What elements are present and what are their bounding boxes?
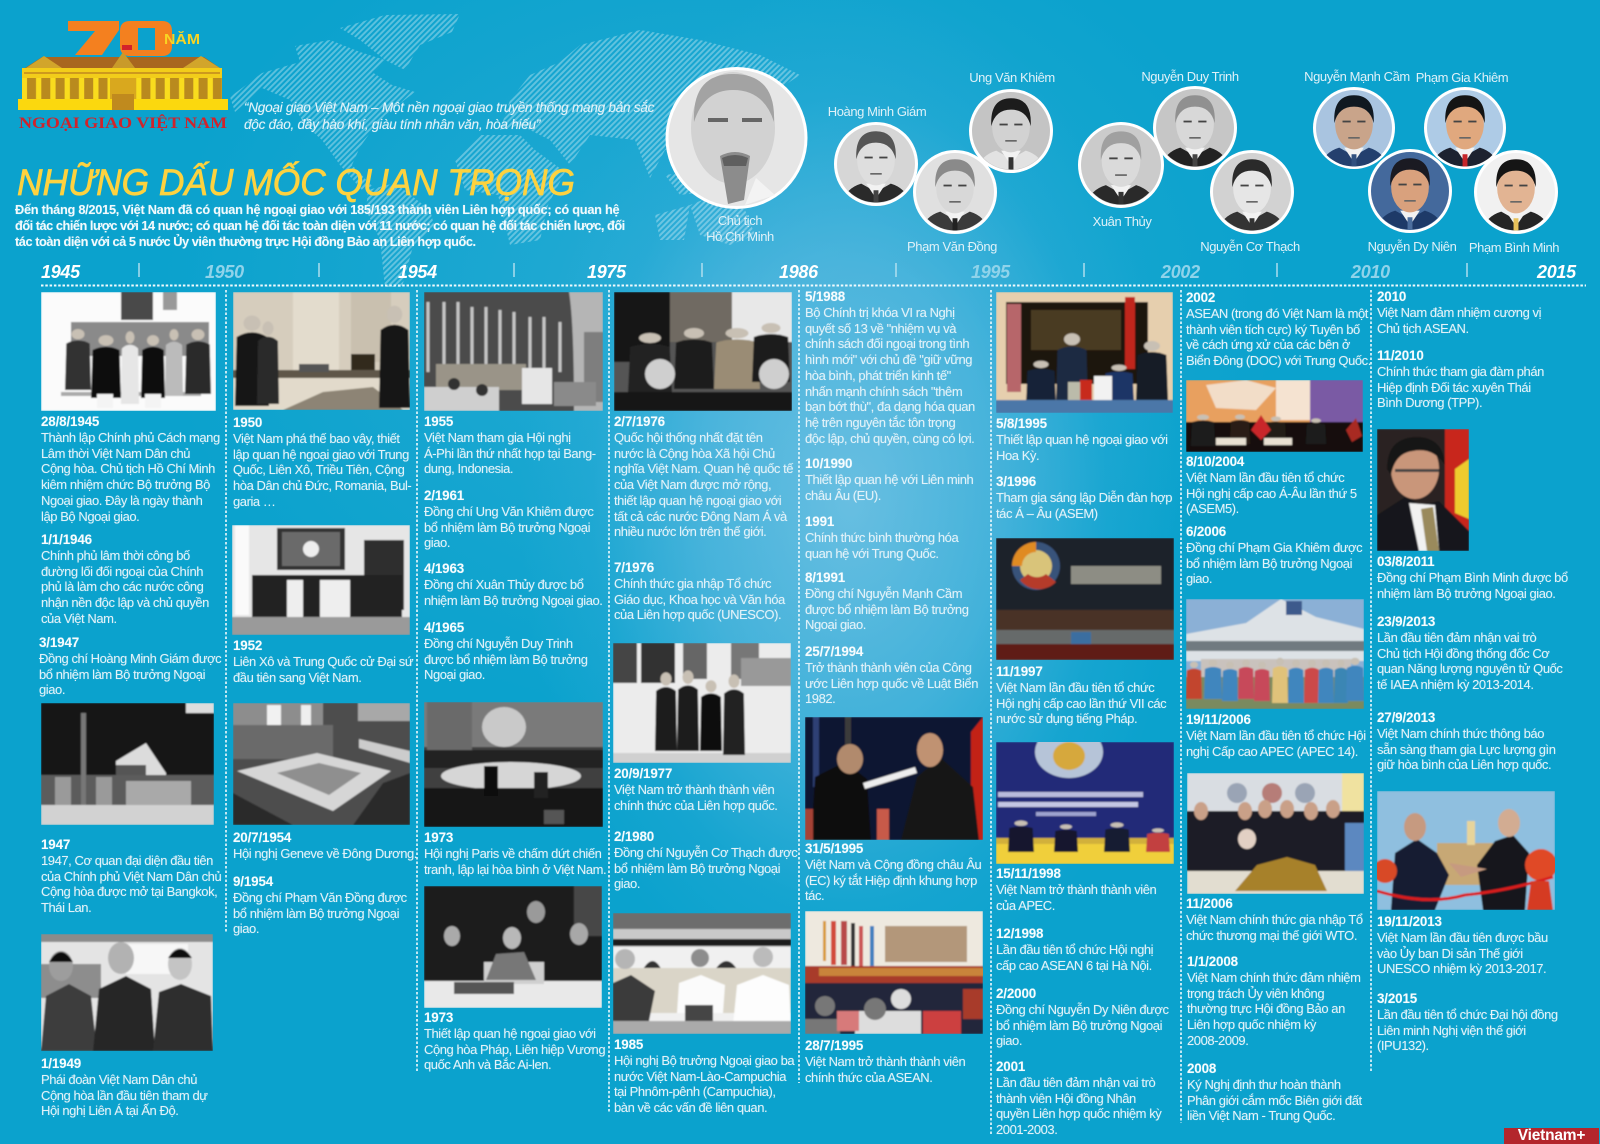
column 5: 1986 to 1995: 5/1988	[805, 289, 845, 304]
heading: những dấu mốc quan trọng: NHỮNG DẤU MỐC QUAN TRỌNG	[17, 161, 575, 203]
column 4: 1975 to 1986: giao.	[614, 876, 640, 891]
photo: 19/11/2013 UNESCO	[1377, 791, 1555, 910]
column 1: 1945 to 1950: Cộng hòa. Chủ tịch Hồ Chí Minh	[41, 461, 215, 476]
intro paragraph: tác toàn diện với cả 5 nước Ủy viên thường trực Hội đồng Bảo an Liên hợp quốc.	[15, 234, 476, 249]
column 7: 2002 to 2010: Ký Nghị định thư hoàn thành	[1187, 1077, 1341, 1092]
column 4: 1975 to 1986: 20/9/1977	[614, 766, 672, 781]
column 8: 2010 to 2015: Chủ tịch Hội đồng thống đốc Cơ	[1377, 646, 1549, 660]
column 5: 1986 to 1995: (EC) ký tắt Hiệp định khung hợp	[805, 872, 977, 888]
column 5: 1986 to 1995: hòa bình, phát triển kinh tế"	[805, 368, 951, 383]
column 6: 1995 to 2002	[996, 416, 1172, 1137]
column 8: 2010 to 2015: vào Ủy ban Di sản Thế giới	[1377, 946, 1523, 960]
timeline years: 1995	[971, 262, 1010, 282]
photo: 1973 signing	[424, 886, 602, 1008]
column 8: 2010 to 2015: nhiệm làm Bộ trưởng Ngoại giao.	[1377, 586, 1555, 600]
column 1: 1945 to 1950: 1/1949	[41, 1056, 81, 1071]
column 1: 1945 to 1950: đường lối đối ngoại của Chính	[41, 564, 203, 578]
column 7: 2002 to 2010: thành viên tích cực) ký Tuyên bố	[1186, 322, 1360, 336]
column 4: 1975 to 1986: nghĩa Việt Nam. Quan hệ quốc tế	[614, 461, 793, 476]
column 5: 1986 to 1995: hình mới" với chủ đề "giữ vững	[805, 352, 972, 367]
column 3: 1954 to 1975: 2/1961	[424, 488, 464, 503]
photo: 11/1997 Francophonie	[996, 538, 1174, 660]
column 7: 2002 to 2010: chức thương mại thế giới WTO.	[1186, 928, 1357, 942]
photo: 20/7/1954 Geneva	[233, 703, 410, 825]
column 6: 1995 to 2002: quyền Liên hợp quốc nhiệm kỳ	[996, 1106, 1161, 1121]
portrait name labels: Phạm Gia Khiêm	[1416, 70, 1508, 85]
column 7: 2002 to 2010: về cách ứng xử của các bên ở	[1186, 337, 1350, 352]
column 8: 2010 to 2015: giữ hòa bình của Liên hợp quốc.	[1377, 757, 1551, 772]
logo: 70 năm ngoại giao Việt Nam	[18, 21, 228, 132]
column 5: 1986 to 1995: hệ trên nguyên tắc tôn trọng	[805, 415, 955, 430]
column 1: 1945 to 1950: Cộng hòa được mở tại Bangkok,	[41, 884, 217, 899]
column 8: 2010 to 2015: 19/11/2013	[1377, 914, 1442, 929]
column 7: 2002 to 2010: 2002	[1186, 290, 1215, 305]
column 3: 1954 to 1975: Ngoại giao.	[424, 667, 485, 682]
portrait name labels: Nguyễn Mạnh Cầm	[1304, 69, 1410, 84]
column 7: 2002 to 2010: 1/1/2008	[1187, 954, 1238, 969]
column 3: 1954 to 1975: 1973	[424, 1010, 453, 1025]
portrait name labels: Ung Văn Khiêm	[969, 70, 1055, 85]
column 7: 2002 to 2010: Việt Nam chính thức gia nhập Tổ	[1186, 912, 1363, 927]
column 2: 1950 to 1954: 9/1954	[233, 874, 273, 889]
column 5: 1986 to 1995: Ngoại giao.	[805, 617, 866, 632]
photo: 1973 Paris conference hall	[424, 702, 603, 827]
column 5: 1986 to 1995: 10/1990	[805, 456, 852, 471]
photo: 15/11/1998 APEC	[996, 742, 1174, 864]
column 5: 1986 to 1995: Trở thành thành viên của Công	[805, 660, 972, 675]
timeline years: 2002	[1161, 262, 1200, 282]
column 8: 2010 to 2015: Lần đầu tiên tổ chức Đại hội đồng	[1377, 1007, 1558, 1022]
column 7: 2002 to 2010: Việt Nam chính thức đảm nhiệm	[1187, 970, 1360, 985]
quote: độc đáo, đầy hào khí, giàu tính nhân văn, hòa hiếu”	[244, 117, 540, 132]
portrait: Ung Văn Khiêm	[969, 89, 1053, 173]
column 2: 1950 to 1954: đầu tiên sang Việt Nam.	[233, 670, 361, 684]
column 6: 1995 to 2002: Hội nghị cấp cao lần thứ VII các	[996, 696, 1166, 710]
column 1: 1945 to 1950	[38, 414, 222, 1118]
column 7: 2002 to 2010: Đồng chí Phạm Gia Khiêm được	[1186, 540, 1362, 555]
quote	[244, 99, 654, 132]
column 5: 1986 to 1995: ước Liên hợp quốc về Luật Biển	[805, 676, 978, 690]
portrait name labels: Xuân Thủy	[1093, 214, 1151, 229]
column 8: 2010 to 2015: Việt Nam đảm nhiệm cương vị	[1377, 305, 1541, 320]
column 7: 2002 to 2010: (ASEM5).	[1186, 501, 1239, 516]
column 4: 1975 to 1986: 7/1976	[614, 560, 654, 575]
column 7: 2002 to 2010: Hội nghị cấp cao Á-Âu lần thứ 5	[1186, 486, 1357, 500]
column 6: 1995 to 2002: bổ nhiệm làm Bộ trưởng Ngoại	[996, 1018, 1162, 1032]
column 1: 1945 to 1950: Thái Lan.	[41, 900, 91, 915]
timeline years: 1950	[205, 262, 244, 282]
column 5: 1986 to 1995: Bộ Chính trị khóa VI ra Nghị	[805, 305, 955, 320]
portrait name labels: Nguyễn Dy Niên	[1368, 239, 1456, 254]
column 7: 2002 to 2010: Phân giới cắm mốc Biên giới đất	[1187, 1092, 1362, 1108]
portrait: Phạm Gia Khiêm	[1424, 87, 1506, 169]
column 6: 1995 to 2002: Hoa Kỳ.	[996, 448, 1039, 462]
column 4: 1975 to 1986: Quốc hội thống nhất đặt tên	[614, 430, 763, 445]
column 4: 1975 to 1986: bàn về các vấn đề liên quan.	[614, 1100, 767, 1115]
column 4: 1975 to 1986: của Liên hợp quốc (UNESCO).	[614, 607, 781, 622]
column 1: 1945 to 1950: lập Bộ Ngoại giao.	[41, 508, 139, 524]
column 7: 2002 to 2010: ASEAN (trong đó Việt Nam là một	[1186, 306, 1368, 321]
column 4: 1975 to 1986: 2/7/1976	[614, 414, 665, 429]
column 1: 1945 to 1950: 1947	[41, 837, 70, 852]
portrait: Nguyễn Mạnh Cầm	[1313, 87, 1395, 169]
column 8: 2010 to 2015: Chủ tịch ASEAN.	[1377, 320, 1469, 336]
portrait name labels: Phạm Văn Đồng	[907, 239, 997, 254]
column 1: 1945 to 1950: Đồng chí Hoàng Minh Giám được	[39, 651, 221, 666]
column 7: 2002 to 2010	[1186, 290, 1371, 1123]
portrait: Xuân Thủy	[1078, 122, 1164, 208]
column 4: 1975 to 1986: Chính thức gia nhập Tổ chức	[614, 576, 771, 591]
column 5: 1986 to 1995: Thiết lập quan hệ với Liên minh	[805, 472, 973, 487]
column 5: 1986 to 1995: quyết số 13 về "nhiệm vụ và	[805, 320, 956, 336]
column 7: 2002 to 2010: trọng trách Ủy viên không	[1187, 986, 1324, 1000]
portrait: Nguyễn Cơ Thạch	[1210, 150, 1294, 234]
photo: 20/9/1977 UN	[613, 643, 791, 763]
column 7: 2002 to 2010: 2008-2009.	[1187, 1033, 1248, 1048]
column 3: 1954 to 1975: nhiệm làm Bộ trưởng Ngoại giao.	[424, 592, 602, 608]
column 6: 1995 to 2002: Lần đầu tiên đảm nhận vai trò	[996, 1075, 1155, 1090]
column 8: 2010 to 2015: 11/2010	[1377, 348, 1424, 363]
photo: 19/11/2006 APEC 14	[1186, 599, 1364, 709]
photo: 03/8/2011 Phạm Bình Minh	[1377, 429, 1469, 551]
column 1: 1945 to 1950: 1/1/1946	[41, 532, 92, 547]
intro paragraph: đối tác chiến lược với 14 nước; có quan hệ đối tác toàn diện với 11 nước; có quan hệ đối tác chiến lược, đối	[15, 218, 625, 233]
column 4: 1975 to 1986: Hội nghị Bộ trưởng Ngoại giao ba	[614, 1053, 794, 1068]
column 7: 2002 to 2010: giao.	[1186, 571, 1212, 586]
column 8: 2010 to 2015: sẵn sàng tham gia Lực lượng gìn	[1377, 742, 1556, 756]
column 6: 1995 to 2002: giao.	[996, 1033, 1022, 1048]
column 2: 1950 to 1954: 1952	[233, 638, 262, 653]
column 6: 1995 to 2002: Thiết lập quan hệ ngoại giao với	[996, 432, 1168, 447]
column 6: 1995 to 2002: thành viên Hội đồng Nhân	[996, 1090, 1136, 1106]
portrait: Phạm Văn Đồng	[913, 150, 997, 234]
column 3: 1954 to 1975: Đồng chí Nguyễn Duy Trinh	[424, 636, 573, 651]
column 6: 1995 to 2002: 2001	[996, 1059, 1025, 1074]
column 4: 1975 to 1986: thiết lập quan hệ ngoại giao với	[614, 493, 781, 508]
column 4: 1975 to 1986: tất cả các nước Đông Nam Á và	[614, 508, 787, 524]
column 5: 1986 to 1995: 1991	[805, 514, 834, 529]
column 2: 1950 to 1954: 20/7/1954	[233, 830, 291, 845]
column 4: 1975 to 1986: 1985	[614, 1037, 643, 1052]
column 3: 1954 to 1975: Việt Nam tham gia Hội nghị	[424, 430, 571, 445]
photo: 11/2006 WTO	[1187, 773, 1364, 894]
portrait name labels	[706, 69, 1559, 255]
column 1: 1945 to 1950: 3/1947	[39, 635, 79, 650]
column 6: 1995 to 2002: 12/1998	[996, 926, 1043, 941]
column 3: 1954 to 1975: 4/1965	[424, 620, 464, 635]
column 3: 1954 to 1975: quốc Anh và Bắc Ai-len.	[424, 1057, 551, 1072]
column 8: 2010 to 2015: Việt Nam lần đầu tiên được bầu	[1377, 930, 1548, 945]
portrait: Hồ Chí Minh	[666, 67, 808, 209]
column 3: 1954 to 1975: 1955	[424, 414, 453, 429]
column 3: 1954 to 1975: giao.	[424, 535, 450, 550]
column 2: 1950 to 1954: lập quan hệ ngoại giao với Trung	[233, 446, 409, 462]
column 8: 2010 to 2015: (IPU132).	[1377, 1038, 1429, 1053]
column 1: 1945 to 1950: kiêm nhiệm chức Bộ trưởng Bộ	[41, 477, 210, 492]
column 8: 2010 to 2015: tế IAEA nhiệm kỳ 2013-2014.	[1377, 677, 1534, 692]
column 2: 1950 to 1954: Việt Nam phá thế bao vây, thiết	[233, 431, 400, 446]
column 7: 2002 to 2010: 6/2006	[1186, 524, 1226, 539]
column 3: 1954 to 1975: Đồng chí Ung Văn Khiêm được	[424, 504, 593, 519]
column 7: 2002 to 2010: Việt Nam lần đầu tiên tổ chức Hội	[1186, 728, 1366, 743]
photo: 1947 Bangkok office	[41, 703, 214, 825]
photo: 8/10/2004 ASEM5	[1186, 380, 1363, 452]
column 6: 1995 to 2002: cấp cao ASEAN 6 tại Hà Nội.	[996, 958, 1152, 972]
column 5: 1986 to 1995: châu Âu (EU).	[805, 488, 881, 502]
column 4: 1975 to 1986: chính thức của Liên hợp quốc.	[614, 798, 777, 812]
column 4: 1975 to 1986	[614, 414, 798, 1115]
portrait: Phạm Bình Minh	[1474, 150, 1558, 234]
column 8: 2010 to 2015: 23/9/2013	[1377, 614, 1435, 629]
column 5: 1986 to 1995: 25/7/1994	[805, 644, 863, 659]
column 8: 2010 to 2015: 03/8/2011	[1377, 554, 1434, 569]
column 8: 2010 to 2015: UNESCO nhiệm kỳ 2013-2017.	[1377, 961, 1546, 976]
column 5: 1986 to 1995: chính thức của ASEAN.	[805, 1070, 932, 1084]
portrait name labels: Nguyễn Duy Trinh	[1141, 69, 1239, 84]
column 5: 1986 to 1995: được bổ nhiệm làm Bộ trưởng	[805, 602, 968, 616]
column 8: 2010 to 2015: Liên minh Nghị viện thế giới	[1377, 1022, 1526, 1038]
column 5: 1986 to 1995: Đồng chí Nguyễn Mạnh Cầm	[805, 586, 962, 601]
column 7: 2002 to 2010: Việt Nam lần đầu tiên tổ chức	[1186, 470, 1344, 485]
column 7: 2002 to 2010: 2008	[1187, 1061, 1216, 1076]
photo: 1950 credentials	[233, 292, 410, 410]
column 1: 1945 to 1950: giao.	[39, 682, 65, 697]
column 5: 1986 to 1995: độc lập, chủ quyền, cùng có lợi.	[805, 431, 974, 446]
portrait: Nguyễn Dy Niên	[1368, 149, 1452, 233]
column 6: 1995 to 2002: Việt Nam trở thành thành viên	[996, 882, 1156, 897]
photo: 28/7/1995 ASEAN	[805, 911, 983, 1034]
timeline ticks and dotted rules	[41, 263, 1586, 1135]
column 5: 1986 to 1995: chính sách đối ngoại trong tình	[805, 336, 969, 351]
column 8: 2010 to 2015: Bình Dương (TPP).	[1377, 395, 1482, 410]
column 6: 1995 to 2002: Việt Nam lần đầu tiên tổ chức	[996, 680, 1154, 695]
column 2: 1950 to 1954: bổ nhiệm làm Bộ trưởng Ngoại	[233, 906, 399, 920]
column 5: 1986 to 1995: Việt Nam trở thành thành viên	[805, 1054, 965, 1069]
column 5: 1986 to 1995: nhấn mạnh chính sách "thêm	[805, 384, 962, 398]
column 2: 1950 to 1954: Hội nghị Geneve về Đông Dương.	[233, 846, 417, 861]
column 7: 2002 to 2010: 11/2006	[1186, 896, 1233, 911]
column 7: 2002 to 2010: Liên hợp quốc nhiệm kỳ	[1187, 1017, 1316, 1032]
column 5: 1986 to 1995: 28/7/1995	[805, 1038, 863, 1053]
column 8: 2010 to 2015: 27/9/2013	[1377, 710, 1435, 725]
column 5: 1986 to 1995: 8/1991	[805, 570, 845, 585]
photo: 1955 Bandung	[424, 292, 603, 411]
photo: 31/5/1995 EC	[805, 717, 983, 840]
column 1: 1945 to 1950: Hội nghị Liên Á tại Ấn Độ.	[41, 1103, 178, 1118]
column 4: 1975 to 1986: bổ nhiệm làm Bộ trưởng Ngoại	[614, 860, 780, 876]
photo: 1985 Phnom Penh	[613, 913, 791, 1034]
timeline years	[41, 262, 1576, 282]
column 7: 2002 to 2010: 8/10/2004	[1186, 454, 1244, 469]
column 5: 1986 to 1995: bạn bớt thù", đa dạng hóa quan	[805, 399, 975, 414]
timeline years: 2010	[1351, 262, 1390, 282]
column 5: 1986 to 1995: Chính thức bình thường hóa	[805, 530, 958, 545]
portrait: Hoàng Minh Giám	[834, 122, 918, 206]
column 8: 2010 to 2015: Hiệp định Đối tác xuyên Thái	[1377, 380, 1531, 394]
column 5: 1986 to 1995: 1982.	[805, 691, 835, 706]
column 2: 1950 to 1954: hòa Dân chủ Đức, Romania, Bul-	[233, 478, 411, 493]
column 4: 1975 to 1986: Đồng chí Nguyễn Cơ Thạch được	[614, 845, 797, 860]
column 6: 1995 to 2002: Tham gia sáng lập Diễn đàn hợp	[996, 490, 1172, 505]
timeline years: 1945	[41, 262, 80, 282]
column 1: 1945 to 1950: Lâm thời Việt Nam Dân chủ	[41, 446, 190, 460]
column 7: 2002 to 2010: 19/11/2006	[1186, 712, 1251, 727]
photo: 28/8/1945 group	[41, 292, 216, 411]
column 1: 1945 to 1950: phủ là làm cho các nước công	[41, 579, 203, 594]
column 2: 1950 to 1954: garia …	[233, 494, 275, 509]
timeline years: 1954	[398, 262, 437, 282]
column 8: 2010 to 2015: Lần đầu tiên đảm nhận vai trò	[1377, 630, 1536, 645]
column 2: 1950 to 1954: giao.	[233, 921, 259, 936]
column 4: 1975 to 1986: 2/1980	[614, 829, 654, 844]
column 3: 1954 to 1975: Á-Phi lần thứ nhất họp tại Bang-	[424, 446, 596, 460]
column 3: 1954 to 1975: Cộng hòa Pháp, Liên hiệp Vương	[424, 1042, 605, 1056]
column 3: 1954 to 1975: bổ nhiệm làm Bộ trưởng Ngoại	[424, 520, 590, 534]
column 4: 1975 to 1986: nước là Cộng hòa Xã hội Chủ	[614, 446, 775, 460]
intro paragraph: Đến tháng 8/2015, Việt Nam đã có quan hệ ngoại giao với 185/193 thành viên Liên hợp quốc; có quan hệ	[15, 202, 619, 217]
column 4: 1975 to 1986: nhiều nước lớn trên thế giới.	[614, 524, 766, 539]
column 1: 1945 to 1950: 28/8/1945	[41, 414, 99, 429]
column 6: 1995 to 2002: 5/8/1995	[996, 416, 1047, 431]
quote: “Ngoại giao Việt Nam – Một nền ngoại giao truyền thống mang bản sắc	[244, 100, 654, 115]
column 1: 1945 to 1950: Cộng hòa lần đầu tiên tham dự	[41, 1088, 208, 1102]
photo: 2/7/1976	[614, 292, 792, 411]
photo: 1952 flag ceremony	[232, 525, 410, 635]
column 1: 1945 to 1950: 1947, Cơ quan đại diện đầu tiên	[41, 853, 213, 868]
logo: 70 năm ngoại giao Việt Nam: NĂM	[164, 31, 200, 48]
column 2: 1950 to 1954	[232, 415, 417, 936]
column 3: 1954 to 1975: Thiết lập quan hệ ngoại giao với	[424, 1026, 596, 1041]
column 3: 1954 to 1975	[424, 414, 606, 1072]
column 4: 1975 to 1986: Giáo dục, Khoa học và Văn hóa	[614, 592, 785, 606]
column 3: 1954 to 1975: tranh, lập lại hòa bình ở Việt Nam.	[424, 862, 606, 876]
column 3: 1954 to 1975: được bổ nhiệm làm Bộ trưởng	[424, 652, 587, 666]
column 8: 2010 to 2015: Đồng chí Phạm Bình Minh được bổ	[1377, 570, 1568, 585]
column 5: 1986 to 1995: tác.	[805, 888, 824, 903]
column 4: 1975 to 1986: Việt Nam trở thành thành viên	[614, 782, 774, 797]
column 3: 1954 to 1975: Hội nghị Paris về chấm dứt chiến	[424, 846, 601, 861]
column 7: 2002 to 2010: thường trực Hội đồng Bảo an	[1187, 1001, 1345, 1016]
column 7: 2002 to 2010: Biển Đông (DOC) với Trung Quốc.	[1186, 353, 1371, 368]
column 8: 2010 to 2015: 3/2015	[1377, 991, 1417, 1006]
column 6: 1995 to 2002: 11/1997	[996, 664, 1043, 679]
column 6: 1995 to 2002: 3/1996	[996, 474, 1036, 489]
column 1: 1945 to 1950: nhận nền độc lập và chủ quyền	[41, 595, 209, 610]
column 5: 1986 to 1995: 31/5/1995	[805, 841, 863, 856]
portrait: Nguyễn Duy Trinh	[1153, 86, 1237, 170]
portrait name labels: Hoàng Minh Giám	[828, 104, 926, 119]
column 5: 1986 to 1995: quan hệ với Trung Quốc.	[805, 546, 939, 560]
column 8: 2010 to 2015: 2010	[1377, 289, 1406, 304]
column 6: 1995 to 2002: 15/11/1998	[996, 866, 1061, 881]
column 7: 2002 to 2010: bổ nhiệm làm Bộ trưởng Ngoại	[1186, 556, 1352, 570]
column 1: 1945 to 1950: Ngoại giao. Đây là ngày thành	[41, 493, 202, 508]
column 7: 2002 to 2010: nghị Cấp cao APEC (APEC 14).	[1186, 744, 1358, 758]
column 6: 1995 to 2002: của APEC.	[996, 898, 1055, 912]
column 1: 1945 to 1950: của Chính phủ Việt Nam Dân chủ	[41, 868, 221, 884]
portrait name labels: Chủ tịch	[718, 213, 762, 228]
column 6: 1995 to 2002: 2001-2003.	[996, 1122, 1057, 1137]
column 1: 1945 to 1950: Thành lập Chính phủ Cách mạng	[41, 430, 220, 445]
timeline years: 1975	[587, 262, 626, 282]
column 8: 2010 to 2015	[1376, 289, 1568, 1053]
column 4: 1975 to 1986: tại Phnôm-pênh (Campuchia),	[614, 1084, 776, 1099]
timeline years: 2015	[1537, 262, 1576, 282]
intro paragraph	[14, 202, 625, 249]
column 2: 1950 to 1954: Quốc, Liên Xô, Triều Tiên, Cộng	[233, 462, 404, 477]
world map background	[230, 14, 800, 287]
column 3: 1954 to 1975: 4/1963	[424, 561, 464, 576]
photo: 5/8/1995 US signing	[996, 292, 1173, 413]
portrait name labels: Phạm Bình Minh	[1469, 240, 1559, 255]
portrait name labels: Hồ Chí Minh	[706, 229, 774, 244]
column 7: 2002 to 2010: liền Việt Nam - Trung Quốc.	[1187, 1108, 1335, 1123]
column 6: 1995 to 2002: nước sử dụng tiếng Pháp.	[996, 711, 1137, 726]
column 6: 1995 to 2002: 2/2000	[996, 986, 1036, 1001]
photo: 1/1949 three delegates	[41, 934, 213, 1051]
column 8: 2010 to 2015: Chính thức tham gia đàm phán	[1377, 364, 1544, 379]
column 1: 1945 to 1950: Phái đoàn Việt Nam Dân chủ	[41, 1072, 197, 1087]
column 5: 1986 to 1995: Việt Nam và Cộng đồng châu Âu	[805, 857, 981, 872]
column 1: 1945 to 1950: bổ nhiệm làm Bộ trưởng Ngoại	[39, 666, 205, 682]
column 3: 1954 to 1975: dung, Indonesia.	[424, 461, 513, 476]
column 4: 1975 to 1986: nước Việt Nam-Lào-Campuchia	[614, 1068, 786, 1084]
column 2: 1950 to 1954: Liên Xô và Trung Quốc cử Đại sứ	[233, 654, 413, 669]
logo: 70 năm ngoại giao Việt Nam: NGOẠI GIAO VIỆT NAM	[19, 115, 227, 132]
portrait name labels: Nguyễn Cơ Thạch	[1200, 239, 1300, 254]
column 2: 1950 to 1954: Đồng chí Phạm Văn Đồng được	[233, 890, 407, 905]
column 3: 1954 to 1975: Đồng chí Xuân Thủy được bổ	[424, 577, 583, 592]
column 6: 1995 to 2002: Đồng chí Nguyễn Dy Niên được	[996, 1002, 1169, 1017]
column 5: 1986 to 1995	[804, 289, 982, 1084]
column 6: 1995 to 2002: tác Á – Âu (ASEM)	[996, 506, 1098, 520]
column 3: 1954 to 1975: 1973	[424, 830, 453, 845]
column 8: 2010 to 2015: quan Năng lượng nguyên tử Quốc	[1377, 661, 1562, 676]
column 1: 1945 to 1950: của Việt Nam.	[41, 611, 117, 626]
column 1: 1945 to 1950: Chính phủ lâm thời công bố	[41, 548, 190, 563]
column 4: 1975 to 1986: của Việt Nam được mở rộng,	[614, 477, 771, 492]
timeline years: 1986	[779, 262, 818, 282]
column 8: 2010 to 2015: Việt Nam chính thức thông báo	[1377, 726, 1544, 741]
column 2: 1950 to 1954: 1950	[233, 415, 262, 430]
column 6: 1995 to 2002: Lần đầu tiên tổ chức Hội nghị	[996, 942, 1153, 957]
